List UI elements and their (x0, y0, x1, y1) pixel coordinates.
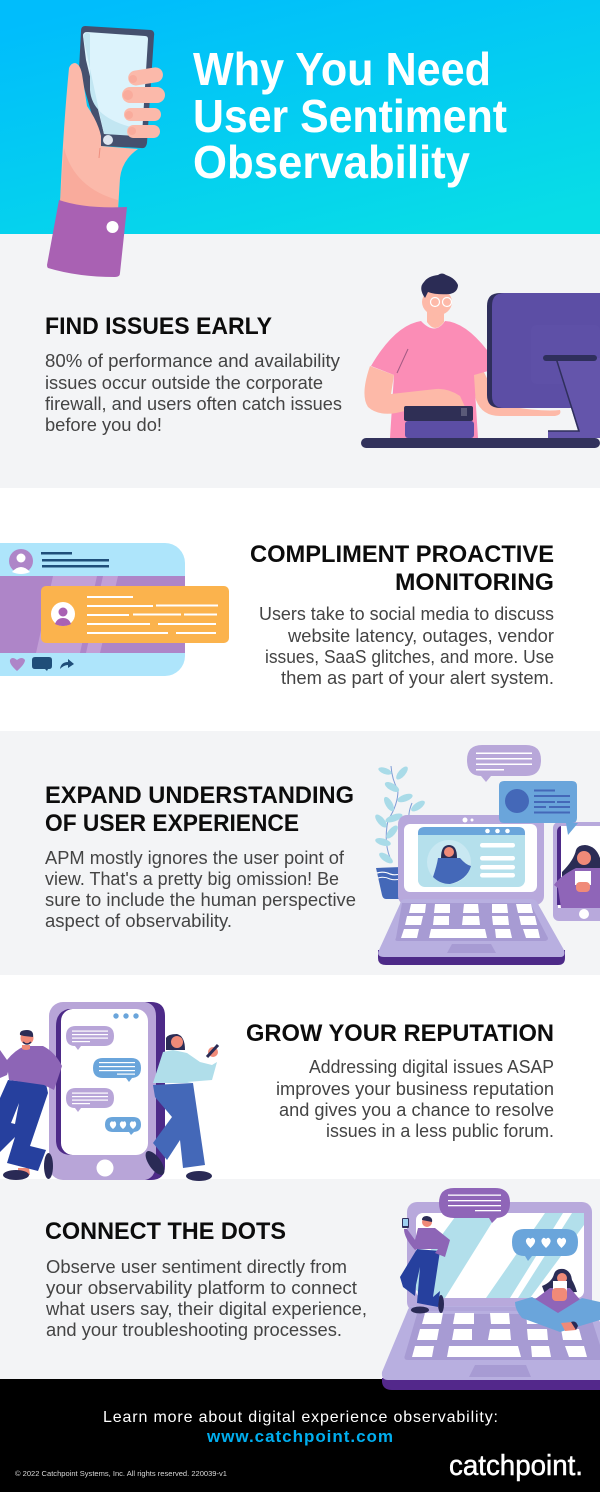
text block: expand understanding: APM mostly ignores the user point of (45, 848, 345, 868)
man (0, 1030, 62, 1180)
bubble: purple text (467, 745, 541, 782)
heading: find issues early: FIND ISSUES EARLY (45, 313, 272, 340)
text block: connect the dots: Observe user sentiment directly from (46, 1257, 347, 1277)
illustration: laptop with two people (382, 1188, 600, 1390)
header banner (0, 0, 600, 234)
man (400, 1216, 450, 1314)
text block: find issues early: issues occur outside the corporate (45, 373, 323, 393)
text block: connect the dots (45, 1257, 367, 1340)
text block: compliment proactive monitoring (259, 604, 554, 688)
footer call to action (103, 1409, 498, 1446)
heading: expand understanding (45, 782, 354, 837)
text block: find issues early: before you do! (45, 415, 162, 435)
reply card (41, 586, 229, 643)
bubble: blue profile (499, 781, 578, 835)
text block: find issues early: firewall, and users often catch issues (45, 394, 342, 414)
keyboard keys (401, 904, 540, 938)
heading: grow your reputation: GROW YOUR REPUTATION (246, 1020, 554, 1047)
title: Observability (193, 136, 470, 188)
bubble: purple text (439, 1188, 510, 1223)
post card (0, 543, 185, 676)
bubble: hearts (512, 1229, 578, 1261)
woman (142, 1034, 218, 1181)
copyright: © 2022 Catchpoint Systems, Inc. All rights reserved. 220039-v1 (15, 1469, 227, 1478)
text block: compliment proactive monitoring: issues, SaaS glitches, and more. Use (265, 647, 554, 667)
heading: connect the dots: CONNECT THE DOTS (45, 1218, 286, 1245)
avatar (9, 549, 33, 574)
hair (421, 274, 458, 298)
chat bubble 2 (93, 1058, 141, 1082)
icon: fingers (122, 66, 165, 138)
desk (361, 438, 600, 448)
chat bubble 1 (66, 1026, 114, 1050)
laptop lid (407, 1202, 592, 1312)
text block: expand understanding: aspect of observability. (45, 911, 232, 931)
text block: expand understanding: view. That's a pretty big omission! Be (45, 869, 339, 889)
icon: hand holding phone (47, 26, 165, 277)
text block: connect the dots: your observability platform to connect (46, 1278, 357, 1298)
icon: share arrow (60, 659, 74, 669)
text block: expand understanding (45, 848, 356, 931)
person (364, 274, 560, 438)
icon: comment (32, 657, 52, 671)
monitor (487, 293, 600, 438)
text block: find issues early: 80% of performance and availability (45, 351, 340, 371)
illustration: laptop with video call (373, 745, 600, 965)
chat bubble: hearts (105, 1117, 141, 1135)
title (193, 43, 507, 188)
footer call to action: www.catchpoint.com (206, 1427, 393, 1446)
section backgrounds (0, 234, 600, 1379)
heading: expand understanding: EXPAND UNDERSTANDING (45, 782, 354, 809)
text block: compliment proactive monitoring: website latency, outages, vendor (287, 626, 554, 646)
logo: catchpoint. (449, 1450, 583, 1482)
phone (49, 1002, 165, 1180)
laptop lid (398, 815, 544, 905)
footer band (0, 1379, 600, 1492)
text block: grow your reputation: and gives you a chance to resolve (279, 1100, 554, 1120)
text block: grow your reputation: issues in a less public forum. (326, 1121, 554, 1141)
heading: compliment proactive monitoring: MONITORING (395, 569, 554, 596)
text block: expand understanding: sure to include the human perspective (45, 890, 356, 910)
plant (373, 765, 427, 899)
keyboard keys (412, 1313, 587, 1357)
illustration: social media post (0, 543, 229, 676)
chat bubble 3 (66, 1088, 114, 1112)
glasses (430, 298, 452, 306)
text block: connect the dots: and your troubleshooting processes. (46, 1320, 342, 1340)
heading: compliment proactive monitoring: COMPLIMENT PROACTIVE (250, 541, 554, 568)
text block: connect the dots: what users say, their digital experience, (45, 1299, 367, 1319)
text block: grow your reputation: Addressing digital issues ASAP (309, 1057, 554, 1077)
post lines (41, 552, 109, 568)
heading: compliment proactive monitoring (250, 541, 554, 596)
laptop base (382, 1306, 600, 1390)
text block: grow your reputation: improves your business reputation (276, 1079, 554, 1099)
illustration: person at computer (361, 274, 600, 448)
laptop base (378, 899, 565, 965)
title: Why You Need (193, 43, 491, 95)
text block: compliment proactive monitoring: Users take to social media to discuss (259, 604, 554, 624)
heading: expand understanding: OF USER EXPERIENCE (45, 810, 299, 837)
icon: heart (10, 658, 25, 671)
text block: grow your reputation (276, 1057, 554, 1141)
phone with woman (553, 822, 600, 921)
icon: cuff (47, 200, 127, 277)
text block: find issues early (45, 351, 342, 435)
text block: compliment proactive monitoring: them as part of your alert system. (281, 668, 554, 688)
title: User Sentiment (193, 90, 507, 142)
illustration: chat phone with two people (0, 1002, 218, 1181)
woman (515, 1269, 600, 1332)
footer call to action: Learn more about digital experience observability: (103, 1409, 498, 1426)
